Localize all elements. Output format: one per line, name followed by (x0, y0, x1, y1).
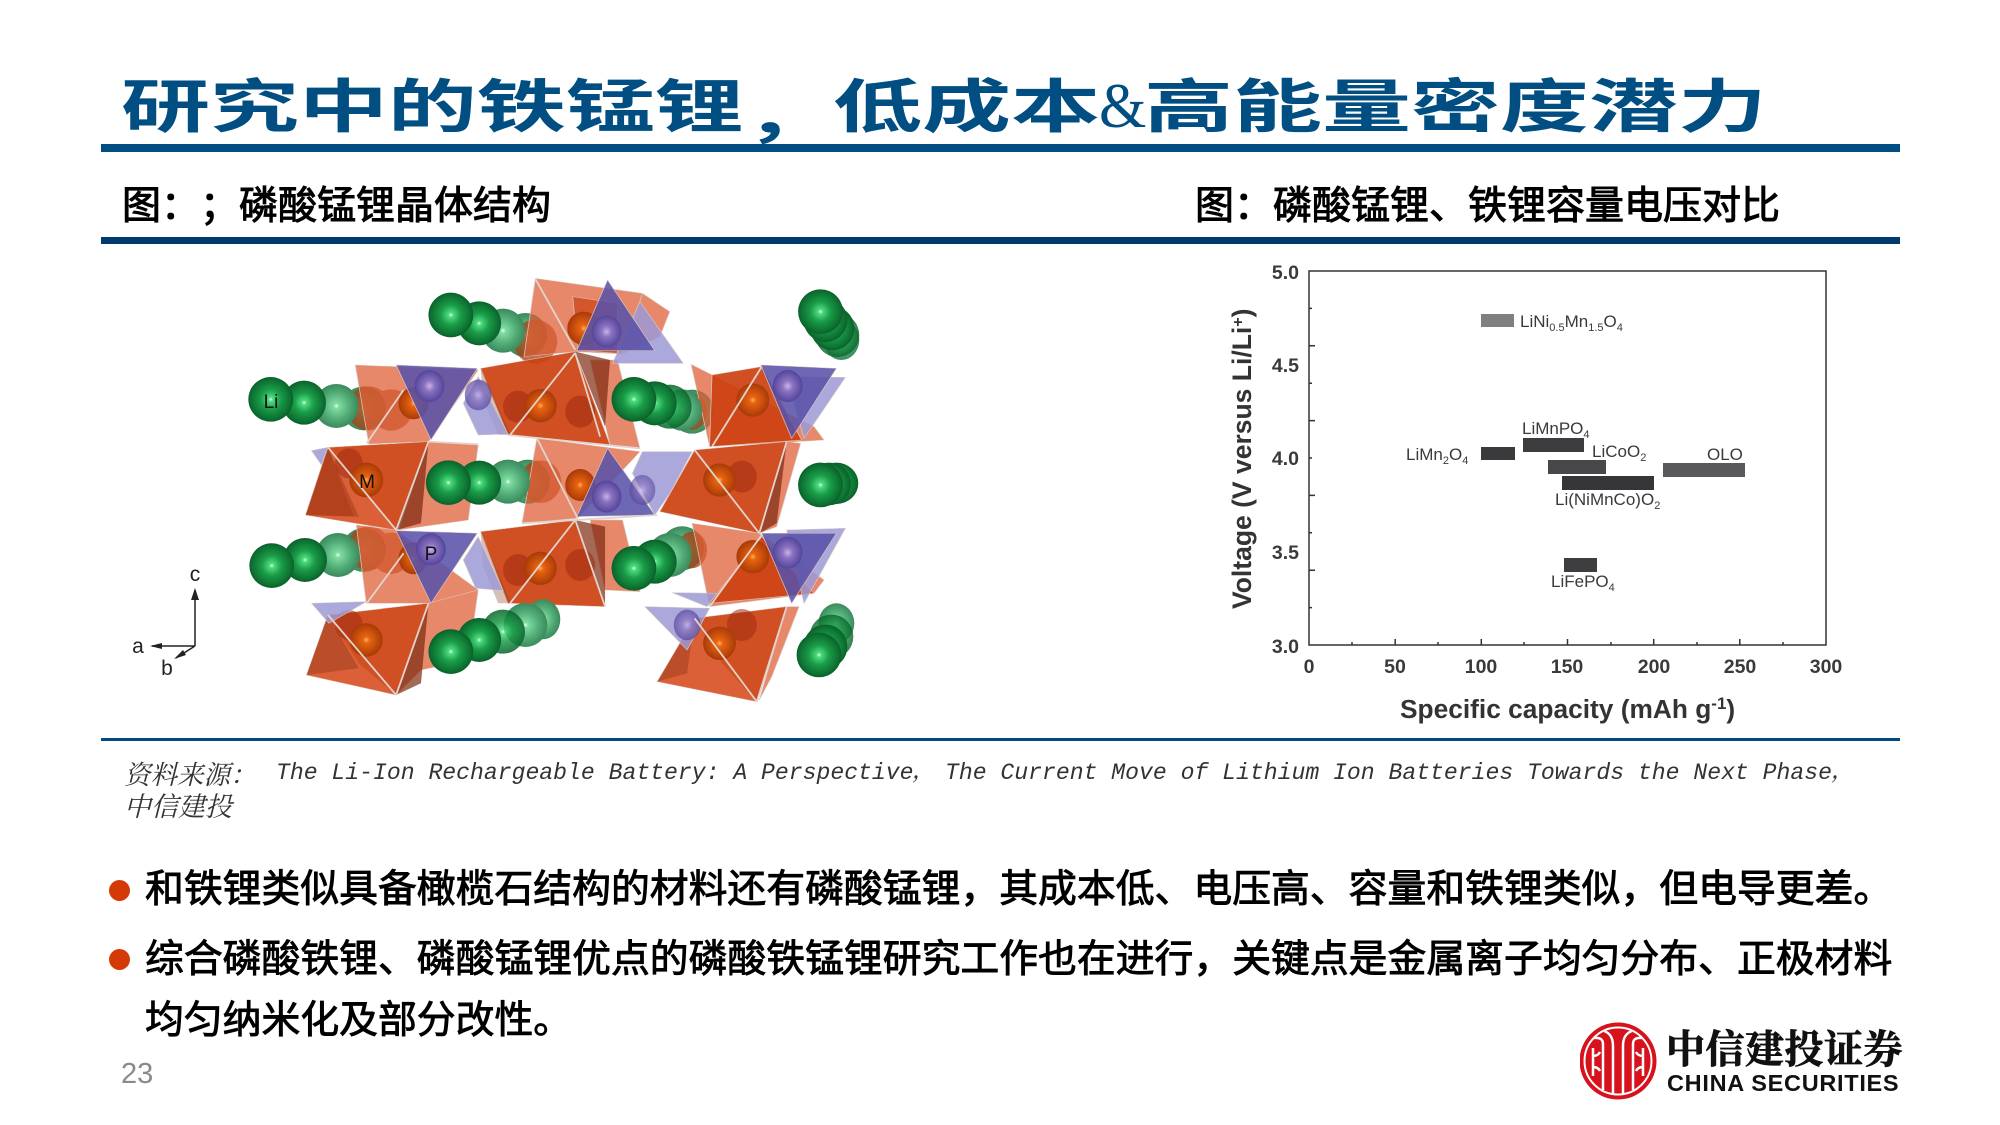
source note: 中信建投 (124, 785, 232, 824)
back lithium spheres (342, 313, 714, 572)
axis tick labels: 150 (1551, 656, 1583, 678)
bullet 1: 和铁锂类似具备橄榄石结构的材料还有磷酸锰锂，其成本低、电压高、容量和铁锂类似，但电导更差。 (145, 868, 1892, 911)
atom labels: M (359, 472, 375, 493)
material labels (1406, 312, 1743, 594)
source note: The Li-Ion Rechargeable Battery: A Perspective (276, 760, 914, 786)
logo emblem (1580, 1022, 1656, 1100)
axis tick labels: 4.5 (1272, 355, 1299, 377)
axis compass: a (132, 635, 144, 658)
material labels: LiMn (1406, 445, 1443, 464)
page number: 23 (121, 1058, 153, 1090)
orange metal atoms (349, 312, 769, 660)
material labels: 4 (1609, 582, 1615, 594)
voltage vs capacity chart (1227, 262, 1842, 724)
material labels: LiCoO (1592, 442, 1640, 461)
material labels: Mn (1565, 312, 1588, 331)
material labels: 2 (1640, 452, 1646, 464)
octahedra edge lines (328, 279, 787, 702)
axis tick labels: 4.0 (1272, 448, 1299, 470)
title: & (1099, 70, 1146, 141)
material labels: LiFePO (1551, 572, 1609, 591)
voltage vs capacity chart: Specific capacity (mAh g (1400, 694, 1711, 724)
front lithium spheres (248, 289, 859, 677)
bullet 2 (109, 938, 1892, 1042)
title: ， (745, 84, 834, 149)
purple tetrahedra (312, 302, 845, 650)
axis tick labels (1272, 262, 1842, 678)
atom labels: P (425, 544, 437, 565)
capacity bars (1481, 314, 1745, 572)
atom labels: Li (264, 392, 278, 413)
material labels: 4 (1462, 455, 1468, 467)
plot frame and ticks (1309, 271, 1826, 645)
hidden atoms seen through the octahedra (347, 320, 707, 574)
axis tick labels: 50 (1384, 656, 1406, 678)
atom labels (264, 392, 437, 565)
dim atoms inside octahedra (335, 391, 757, 641)
source note: ， (912, 751, 935, 785)
axis tick labels: 300 (1810, 656, 1842, 678)
heading: right figure: 图：磷酸锰锂、铁锂容量电压对比 (1195, 185, 1780, 228)
material labels: O (1449, 445, 1462, 464)
source note (124, 751, 1854, 824)
logo: China Securities (1580, 1019, 1903, 1100)
source note: ， (1831, 751, 1854, 785)
title (121, 70, 1767, 149)
purple phosphorus atoms (415, 316, 803, 640)
logo: China Securities: CHINA SECURITIES (1667, 1070, 1899, 1096)
bullet 2: 综合磷酸铁锂、磷酸锰锂优点的磷酸铁锰锂研究工作也在进行，关键点是金属离子均匀分布、正极材料 (145, 938, 1892, 981)
material labels: OLO (1707, 445, 1743, 464)
voltage vs capacity chart: -1 (1711, 694, 1726, 713)
source note: 资料来源： (124, 753, 256, 792)
axis tick labels: 5.0 (1272, 262, 1299, 284)
title: 低成本 (833, 75, 1100, 140)
material labels: 0.5 (1549, 322, 1565, 334)
heading: left figure: 图：；磷酸锰锂晶体结构 (122, 185, 551, 228)
material labels: 2 (1654, 500, 1660, 512)
material labels: Li(NiMnCo)O (1555, 490, 1654, 509)
axis tick labels: 0 (1304, 656, 1315, 678)
title: 高能量密度潜力 (1144, 75, 1767, 140)
axis tick labels: 250 (1724, 656, 1756, 678)
axis titles: + (1230, 317, 1247, 327)
axis tick labels: 200 (1638, 656, 1670, 678)
logo wordmark: 中信建投证券 (1666, 1019, 1903, 1075)
voltage vs capacity chart: ) (1726, 694, 1735, 724)
material labels: 4 (1583, 429, 1590, 441)
axis compass (132, 563, 200, 680)
source note: The Current Move of Lithium Ion Batteries Towards the Next Phase (945, 760, 1832, 786)
axis compass: c (190, 563, 200, 586)
axis titles: Voltage (V versus Li/Li (1227, 327, 1257, 609)
material labels: 2 (1443, 455, 1449, 467)
material labels: LiNi (1520, 312, 1549, 331)
axis compass: b (161, 657, 173, 680)
material labels: 4 (1617, 322, 1623, 334)
title: 研究中的铁锰锂 (121, 75, 744, 140)
material labels: LiMnPO (1522, 419, 1583, 438)
axis tick labels: 3.5 (1272, 542, 1299, 564)
material labels: 1.5 (1588, 322, 1604, 334)
orange octahedra (306, 278, 845, 702)
axis tick labels: 100 (1465, 656, 1497, 678)
axis tick labels: 3.0 (1272, 636, 1299, 658)
material labels: O (1604, 312, 1617, 331)
axis titles: ) (1227, 309, 1257, 317)
bullet 2: 均匀纳米化及部分改性。 (145, 999, 572, 1042)
